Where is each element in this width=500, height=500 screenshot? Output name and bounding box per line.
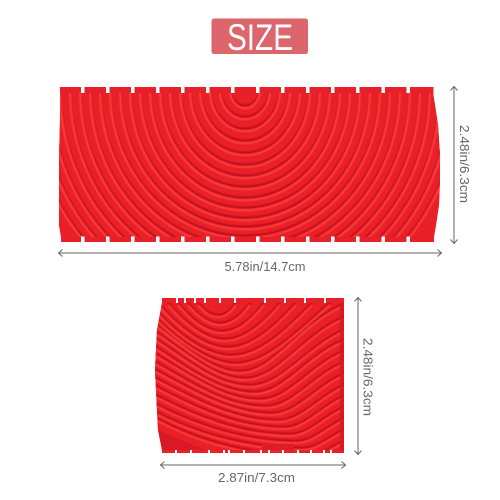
title: SIZE [227, 17, 293, 58]
arrow: small roller width [160, 462, 346, 468]
label: small roller height: 2.48in/6.3cm [360, 338, 374, 416]
label: large roller width: 5.78in/14.7cm [224, 260, 306, 274]
label: large roller height: 2.48in/6.3cm [457, 125, 471, 203]
arrow: large roller height [450, 86, 458, 244]
arrow: small roller height [354, 298, 362, 454]
small wood grain roller [155, 298, 344, 453]
large wood grain roller [59, 87, 440, 242]
arrow: large roller width [58, 250, 442, 256]
top and bottom notches [175, 297, 332, 454]
label: small roller width: 2.87in/7.3cm [218, 471, 295, 485]
top and bottom notches [81, 86, 410, 242]
